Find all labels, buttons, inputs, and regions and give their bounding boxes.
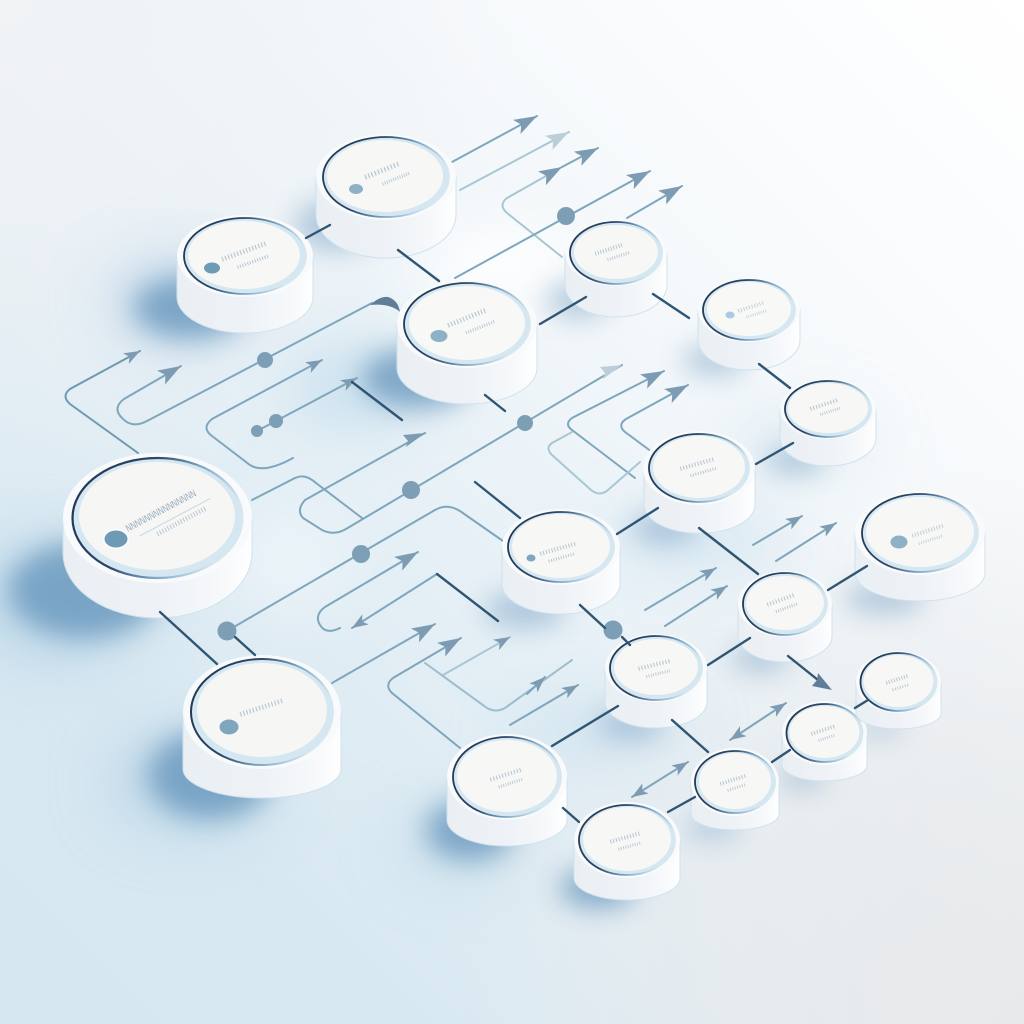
line: elbow (252, 476, 362, 518)
arrow: lower right (510, 685, 578, 725)
node 16 label: IIIIIIIIII (719, 773, 748, 788)
node 5 label: IIIIIIIIII (737, 300, 766, 315)
soft ambient glow and tint (0, 225, 870, 875)
node 13 label: IIIIIIIIIIIIII (238, 698, 284, 719)
node 5 label: IIIIIIIIII (745, 308, 767, 320)
node 3 label (446, 306, 496, 342)
node 11 label: IIIIIIIIII (766, 593, 796, 609)
node 16 (691, 748, 779, 830)
arrow: lower loop return (352, 574, 437, 628)
arrow: lower loop (388, 638, 461, 748)
arrow: top 1 (452, 116, 537, 162)
node 3 label: IIIIIIIIIIIII (464, 319, 496, 337)
node 7 label: IIIIIIIIIIII (679, 457, 716, 473)
node 1 label: IIIIIIIIIIIII (381, 171, 411, 188)
node 1 label: IIIIIIIIIII (363, 161, 401, 182)
node 7 label (679, 457, 718, 481)
node 12 label: IIIIIIIIIII (645, 668, 671, 679)
node 10 label: IIIIIIIIIIII (911, 524, 945, 540)
node 9 label (539, 542, 580, 566)
node 10 label: IIIIIIIIIII (917, 533, 944, 546)
node 6 label (809, 398, 842, 420)
arrowhead: lower right dark (812, 673, 832, 690)
node 8 large (63, 453, 252, 618)
node 2 label (220, 241, 272, 275)
node 15 label (609, 831, 644, 854)
node 9 label: IIIIIIIIIIIII (539, 542, 578, 558)
node 2 label: IIIIIIIIIIIIIII (220, 241, 268, 264)
node 4 label (594, 242, 630, 266)
node 10 (855, 491, 985, 601)
line: lower valley (425, 660, 572, 710)
node 12 label (637, 659, 674, 681)
arrow: pale small (443, 637, 510, 675)
node 9 label: IIIIIIIIIII (547, 551, 575, 564)
arrow: left outer loop (66, 351, 140, 453)
node 11 label (766, 593, 799, 616)
drop shadows (9, 199, 925, 908)
node 5 (698, 278, 800, 370)
arrow: double D (730, 703, 786, 740)
node 6 label: IIIIIIIIII (819, 406, 841, 417)
arrow: loop top (502, 167, 562, 257)
node 17 label: IIIIIIIII (810, 724, 837, 738)
node 7 label: IIIIIIIIIII (689, 466, 717, 478)
arrow: top right (627, 186, 682, 218)
node 4 (565, 220, 667, 317)
arrow: through node (455, 171, 650, 278)
arrow: top 2 pale (460, 132, 569, 190)
line: pale loop (548, 432, 640, 494)
node 4 label: IIIIIIIIIII (594, 243, 625, 258)
arrow: pair A1 (645, 568, 716, 610)
arrow: centre box route (300, 365, 622, 533)
node 13 (183, 655, 341, 798)
node 11 (738, 571, 832, 662)
node 12 label: IIIIIIIIIII (637, 659, 672, 673)
node 18 label (885, 674, 912, 694)
arrow: pair A2 (665, 586, 727, 626)
node 17 (782, 701, 867, 781)
node 18 label: IIIIIIIII (885, 674, 910, 687)
node 17 label (810, 724, 839, 745)
arrow: double C (632, 762, 688, 797)
node 17 label: IIIIIIII (817, 733, 836, 743)
node 11 label: IIIIIIIIII (774, 601, 799, 614)
node 16 label (719, 773, 750, 795)
arrow: loop top branch (562, 148, 598, 167)
node 15 label: IIIIIIIIIII (609, 831, 642, 846)
arrow: valley small (527, 677, 545, 694)
arrow: left mid loop (206, 360, 322, 468)
node 6 (780, 379, 876, 466)
arrow: right loop one (568, 371, 664, 478)
arrow: lower centre (332, 624, 435, 683)
node 10 label (911, 524, 948, 548)
arrow: long left route (117, 303, 372, 424)
node 18 (856, 651, 941, 729)
arrow: pair B2 (776, 523, 836, 561)
node 14 label: IIIIIIIIIII (497, 777, 524, 790)
node 3 (397, 280, 537, 404)
junction dots (218, 207, 622, 640)
node 18 label: IIIIIII (891, 682, 910, 692)
node 1 label (363, 159, 411, 193)
node 8 label (124, 484, 215, 550)
node 1 (316, 134, 456, 258)
node 6 label: IIIIIIIIII (809, 398, 840, 413)
node 14 label (489, 768, 526, 792)
node 2 label: IIIIIIIIIIIII (236, 254, 270, 271)
node 3 label: IIIIIIIIIIIII (446, 308, 488, 330)
node 8 label: NNNNNNNNNNNNNNN (124, 488, 198, 535)
arrow: short with beads (257, 378, 357, 431)
node 2 (177, 215, 313, 333)
arrow: pair B1 (753, 516, 802, 545)
node 14 label: IIIIIIIIIII (489, 768, 524, 784)
node 7 (643, 431, 755, 533)
flow lines and arrows (66, 116, 836, 797)
arrowhead: box route (403, 433, 425, 447)
arrow: right loop two (621, 385, 688, 452)
node 15 label: IIIIIIIIII (617, 841, 642, 852)
arrow: lower loop up (318, 552, 418, 631)
node 5 label (737, 300, 768, 322)
line: route into node 9 (227, 507, 503, 631)
dark connectors (160, 225, 868, 822)
node 14 (447, 734, 567, 846)
node 8 label: IIIIIIIIIIIIIIIIIII (155, 506, 208, 538)
node 9 (502, 509, 620, 614)
node 16 label: IIIIIIII (726, 782, 747, 793)
node 15 (574, 802, 680, 900)
node 12 (605, 634, 707, 728)
node 4 label: IIIIIIIIII (606, 250, 630, 262)
arrowhead: pale centre (600, 365, 622, 379)
